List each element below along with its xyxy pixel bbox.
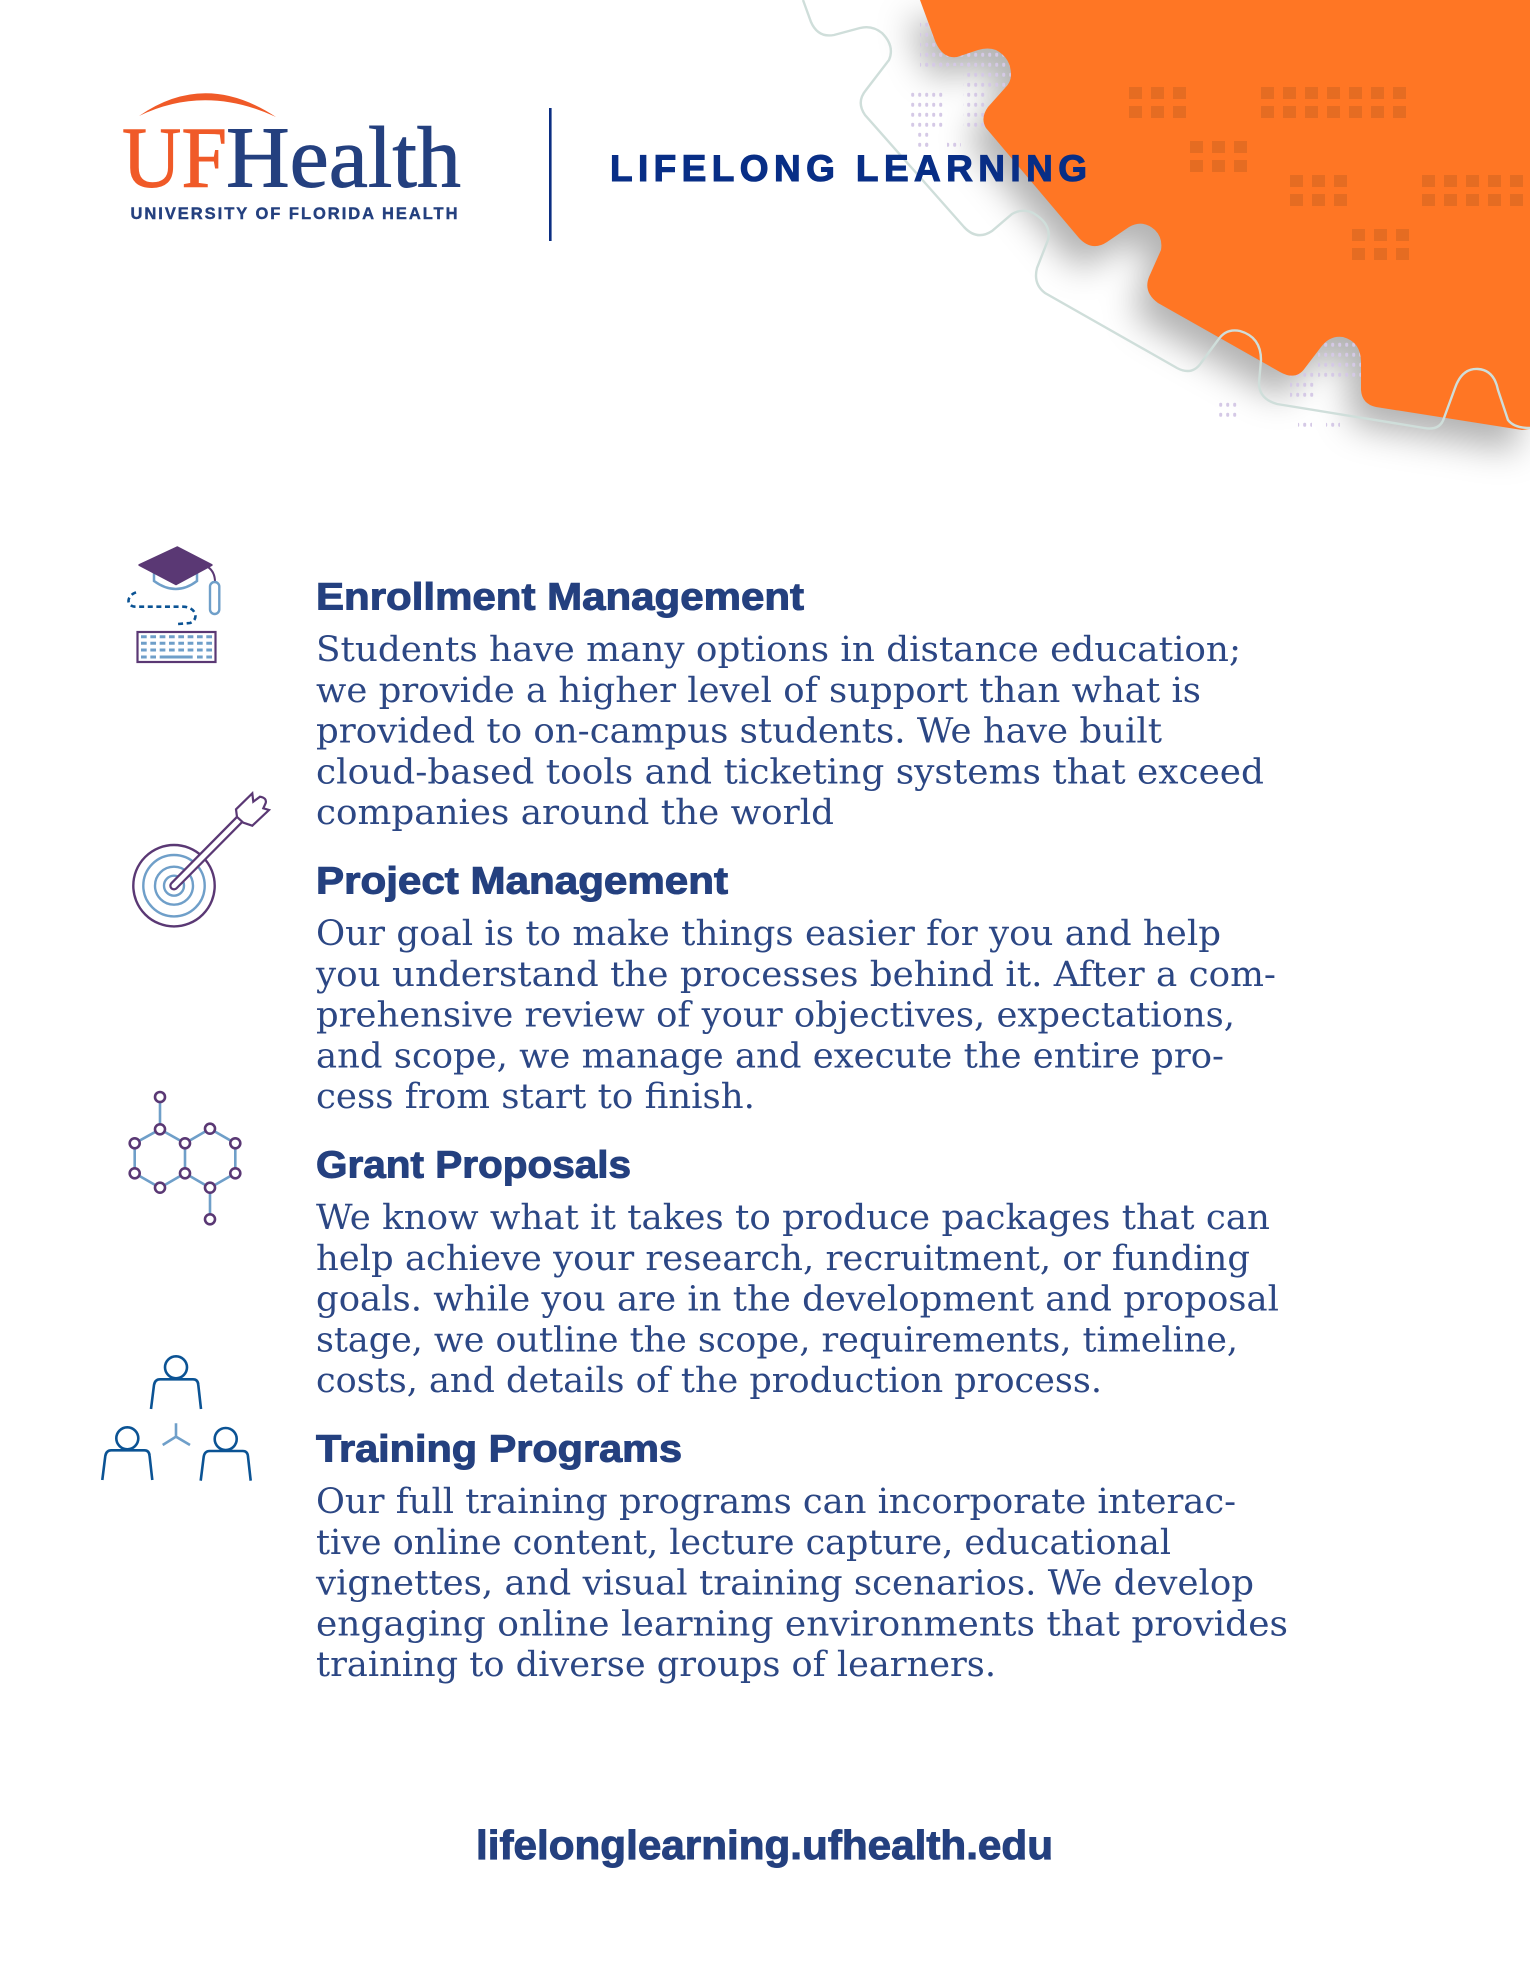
logo tagline: UNIVERSITY OF FLORIDA HEALTH <box>130 205 458 223</box>
body text: Our full training programs can incorporate interac- <box>316 1482 1236 1522</box>
body text: and scope, we manage and execute the entire pro- <box>316 1036 1224 1076</box>
dot patterns <box>909 20 1362 430</box>
body text: tive online content, lecture capture, educational <box>316 1523 1171 1563</box>
logo: UF Health <box>122 93 461 223</box>
body text <box>316 630 1264 833</box>
body text <box>315 1482 1288 1685</box>
orange shape <box>920 0 1530 430</box>
body text: provided to on-campus students. We have built <box>316 712 1162 752</box>
heading: Project Management <box>316 861 728 903</box>
body text: stage, we outline the scope, requirements, timeline, <box>316 1320 1238 1360</box>
soft shadow <box>908 20 1518 450</box>
section: Project Management <box>315 861 1276 1117</box>
icon: graduation cap and keyboard <box>128 547 219 662</box>
body text: Students have many options in distance education; <box>316 630 1241 670</box>
body text: costs, and details of the production process. <box>316 1361 1102 1401</box>
body text: help achieve your research, recruitment, or funding <box>316 1239 1250 1279</box>
body text: Our goal is to make things easier for you and help <box>316 914 1221 954</box>
logo arc <box>139 93 276 117</box>
body text: prehensive review of your objectives, expectations, <box>316 996 1235 1036</box>
heading: Enrollment Management <box>316 577 804 619</box>
footer URL: lifelonglearning.ufhealth.edu <box>476 1822 1053 1868</box>
section: Training Programs <box>315 1429 1288 1685</box>
body text: We know what it takes to produce packages that can <box>316 1198 1270 1238</box>
icon: target and arrow <box>133 793 269 926</box>
heading: Training Programs <box>316 1429 682 1471</box>
body text: goals. while you are in the development and proposal <box>316 1280 1279 1320</box>
logo wordmark: UF <box>122 109 227 206</box>
thin outline curve <box>803 0 1530 429</box>
logo: UF Health: Health <box>226 109 461 206</box>
title: LIFELONG LEARNING <box>610 148 1087 189</box>
dark square pattern <box>1129 87 1523 260</box>
body text <box>316 1198 1279 1401</box>
body text: we provide a higher level of support than what is <box>316 671 1201 711</box>
body text: training to diverse groups of learners. <box>316 1645 996 1685</box>
body text: vignettes, and visual training scenarios. We develop <box>315 1564 1254 1604</box>
icon: molecule <box>130 1092 240 1224</box>
decorative corner: orange shape with line and dots <box>803 0 1530 450</box>
body text: you understand the processes behind it. After a com- <box>315 955 1276 995</box>
body text <box>315 914 1276 1117</box>
section: Grant Proposals <box>316 1145 1279 1401</box>
heading: Grant Proposals <box>316 1145 631 1187</box>
body text: cloud-based tools and ticketing systems that exceed <box>316 752 1264 792</box>
section: Enrollment Management <box>316 577 1264 833</box>
body text: cess from start to finish. <box>316 1077 755 1117</box>
divider line <box>549 108 552 241</box>
icon: three people <box>102 1356 251 1481</box>
body text: companies around the world <box>316 793 834 833</box>
body text: engaging online learning environments that provides <box>316 1604 1288 1644</box>
